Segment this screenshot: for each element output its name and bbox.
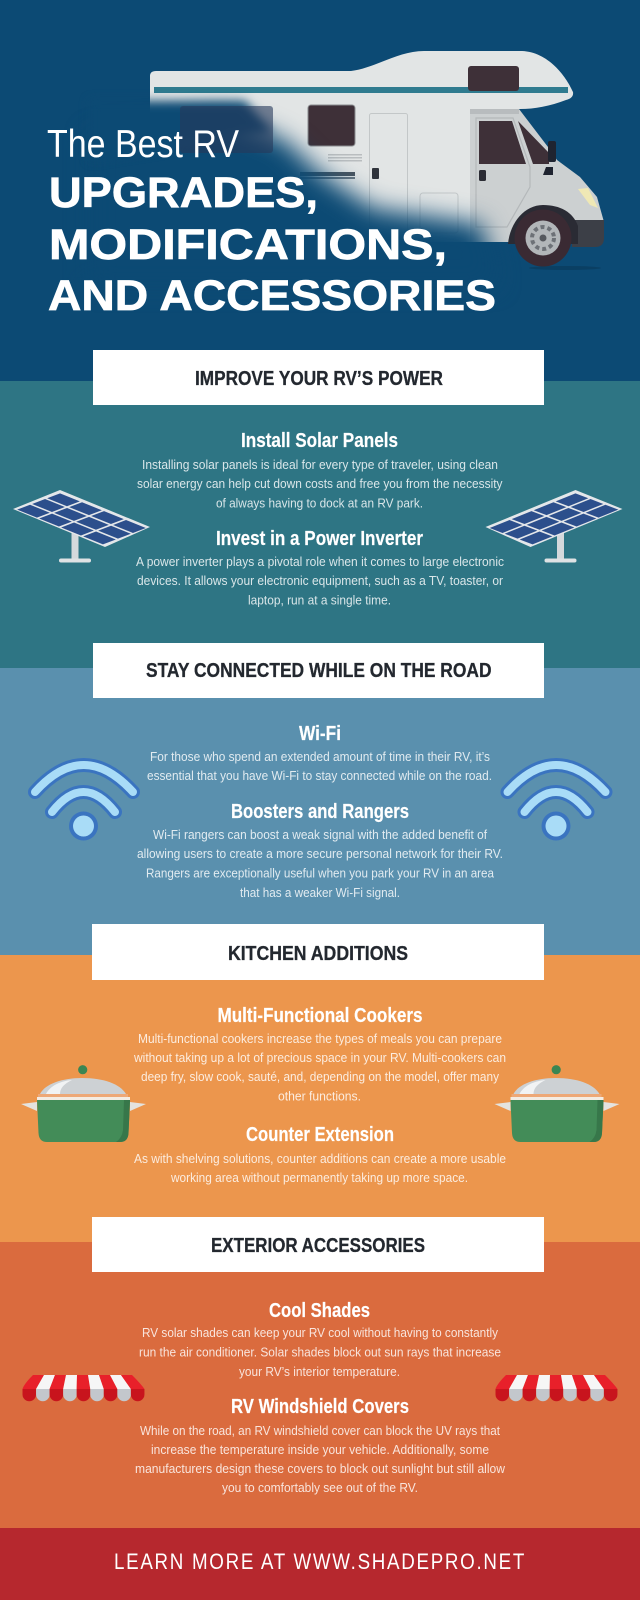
icon: solar panel right	[486, 490, 622, 562]
section heading bar: kitchen: KITCHEN ADDITIONS	[228, 942, 408, 965]
icon: striped awning right	[496, 1375, 617, 1401]
section heading bar: exterior: EXTERIOR ACCESSORIES	[211, 1234, 425, 1257]
text block: install solar panels: Installing solar panels is ideal for every type of traveler, using clean	[142, 457, 498, 472]
text block: invest in a power inverter: devices. It allows your electronic equipment, such as a TV, toaster, or	[137, 573, 504, 588]
text block: counter extension	[134, 1124, 506, 1185]
title: The Best RV	[47, 123, 239, 166]
title	[47, 123, 496, 320]
text block: multi-functional cookers: Multi-Functional Cookers	[218, 1005, 422, 1027]
text block: invest in a power inverter: A power inverter plays a pivotal role when it comes to large electronic	[136, 554, 504, 569]
text block: boosters and rangers: that has a weaker Wi-Fi signal.	[240, 885, 400, 900]
text block: wi-fi	[147, 723, 492, 783]
panel: footer call to action	[0, 1528, 640, 1600]
section heading bar: power: IMPROVE YOUR RV’S POWER	[195, 367, 443, 390]
text block: multi-functional cookers: deep fry, slow cook, sauté, and, depending on the model, offer many	[141, 1069, 499, 1084]
title: UPGRADES,	[49, 169, 318, 217]
text block: cool shades: Cool Shades	[269, 1300, 370, 1322]
section heading bar: kitchen	[92, 924, 544, 980]
text block: multi-functional cookers: other functions.	[278, 1088, 361, 1104]
text block: install solar panels: solar energy can help cut down costs and free you from the necessity	[137, 476, 503, 491]
text block: rv windshield covers	[135, 1396, 505, 1495]
text block: rv windshield covers: RV Windshield Covers	[231, 1396, 409, 1418]
panel: footer call to action: LEARN MORE AT WWW.SHADEPRO.NET	[114, 1549, 526, 1574]
text block: wi-fi: essential that you have Wi-Fi to stay connected while on the road.	[147, 768, 492, 783]
text block: cool shades	[139, 1300, 501, 1379]
title: MODIFICATIONS,	[49, 221, 447, 269]
title: AND ACCESSORIES	[48, 272, 496, 320]
text block: invest in a power inverter	[136, 528, 504, 608]
text block: wi-fi: Wi-Fi	[299, 723, 341, 745]
panel: hero header	[0, 0, 640, 381]
text block: invest in a power inverter: Invest in a Power Inverter	[216, 528, 423, 550]
panel: kitchen additions	[0, 924, 640, 1242]
section heading bar: connected: STAY CONNECTED WHILE ON THE ROAD	[146, 659, 492, 682]
text block: install solar panels: of always having to dock at an RV park.	[216, 496, 423, 510]
text block: multi-functional cookers: Multi-functional cookers increase the types of meals you can prepare	[138, 1031, 502, 1046]
icon: wifi left	[35, 765, 133, 840]
icon: cooking pot right	[494, 1065, 620, 1142]
text block: rv windshield covers: While on the road, an RV windshield cover can block the UV rays that	[140, 1423, 500, 1438]
text block: boosters and rangers: Rangers are exceptionally useful when you park your RV in an area	[146, 866, 495, 880]
text block: counter extension: As with shelving solutions, counter additions can create a more usable	[134, 1151, 506, 1166]
text block: install solar panels	[137, 430, 503, 510]
text block: cool shades: RV solar shades can keep your RV cool without having to constantly	[142, 1325, 498, 1340]
text block: wi-fi: For those who spend an extended amount of time in their RV, it’s	[150, 749, 490, 764]
section heading bar: power	[93, 350, 544, 405]
text block: boosters and rangers	[137, 801, 503, 900]
text block: rv windshield covers: increase the temperature inside your vehicle. Additionally, some	[151, 1442, 489, 1457]
text block: cool shades: run the air conditioner. Solar shades block out sun rays that increase	[139, 1344, 501, 1360]
icon: solar panel left	[13, 490, 150, 562]
text block: cool shades: your RV’s interior temperature.	[239, 1364, 400, 1379]
text block: boosters and rangers: allowing users to create a more secure personal network for their RV.	[137, 846, 503, 861]
text block: rv windshield covers: manufacturers design these covers to block out sunlight but still allow	[135, 1461, 505, 1476]
text block: multi-functional cookers	[133, 1005, 506, 1104]
section heading bar: connected	[93, 643, 544, 698]
icon: cooking pot left	[21, 1065, 146, 1142]
panel: exterior accessories	[0, 1217, 640, 1528]
text block: multi-functional cookers: without taking up a lot of precious space in your RV. Multi-cookers can	[133, 1050, 506, 1065]
icon: striped awning left	[22, 1375, 144, 1401]
text block: rv windshield covers: you to comfortably see out of the RV.	[222, 1480, 418, 1495]
text block: boosters and rangers: Wi-Fi rangers can boost a weak signal with the added benefit of	[153, 827, 487, 842]
text block: counter extension: Counter Extension	[246, 1124, 394, 1146]
icon: RV motorhome fading to the left	[90, 51, 604, 285]
icon: wifi right	[508, 765, 606, 840]
text block: install solar panels: Install Solar Panels	[241, 430, 398, 452]
panel: stay connected	[0, 643, 640, 955]
text block: counter extension: working area without permanently taking up more space.	[170, 1170, 468, 1185]
text block: invest in a power inverter: laptop, run at a single time.	[248, 592, 391, 608]
panel: improve your RV's power	[0, 350, 640, 668]
section heading bar: exterior	[92, 1217, 544, 1272]
text block: boosters and rangers: Boosters and Rangers	[231, 801, 409, 823]
